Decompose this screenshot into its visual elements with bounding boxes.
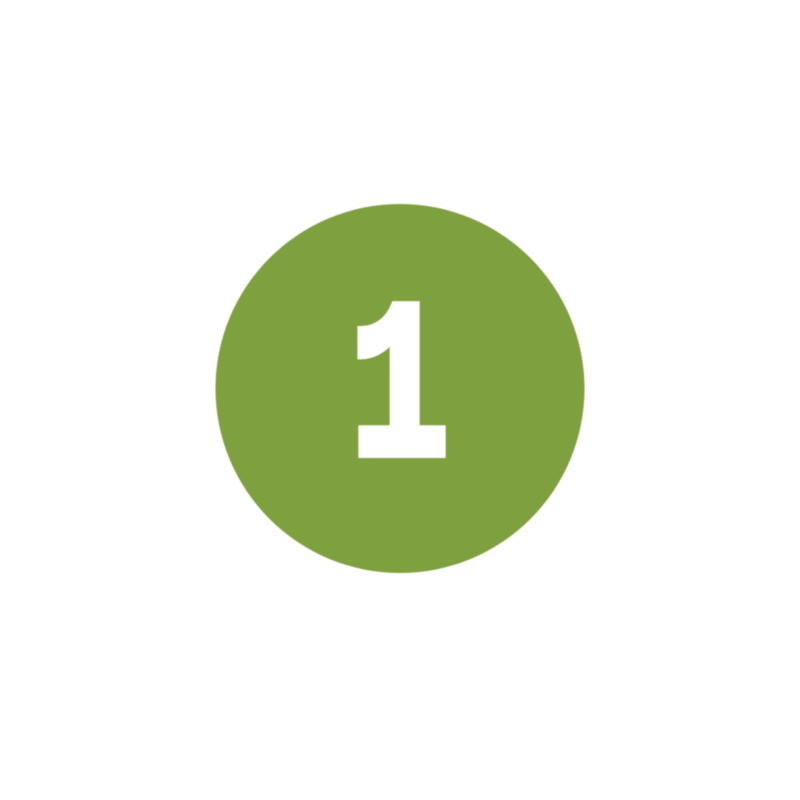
numbered badge — [216, 204, 584, 573]
numeral 1: 1 — [350, 267, 449, 520]
badge circle — [216, 204, 584, 573]
